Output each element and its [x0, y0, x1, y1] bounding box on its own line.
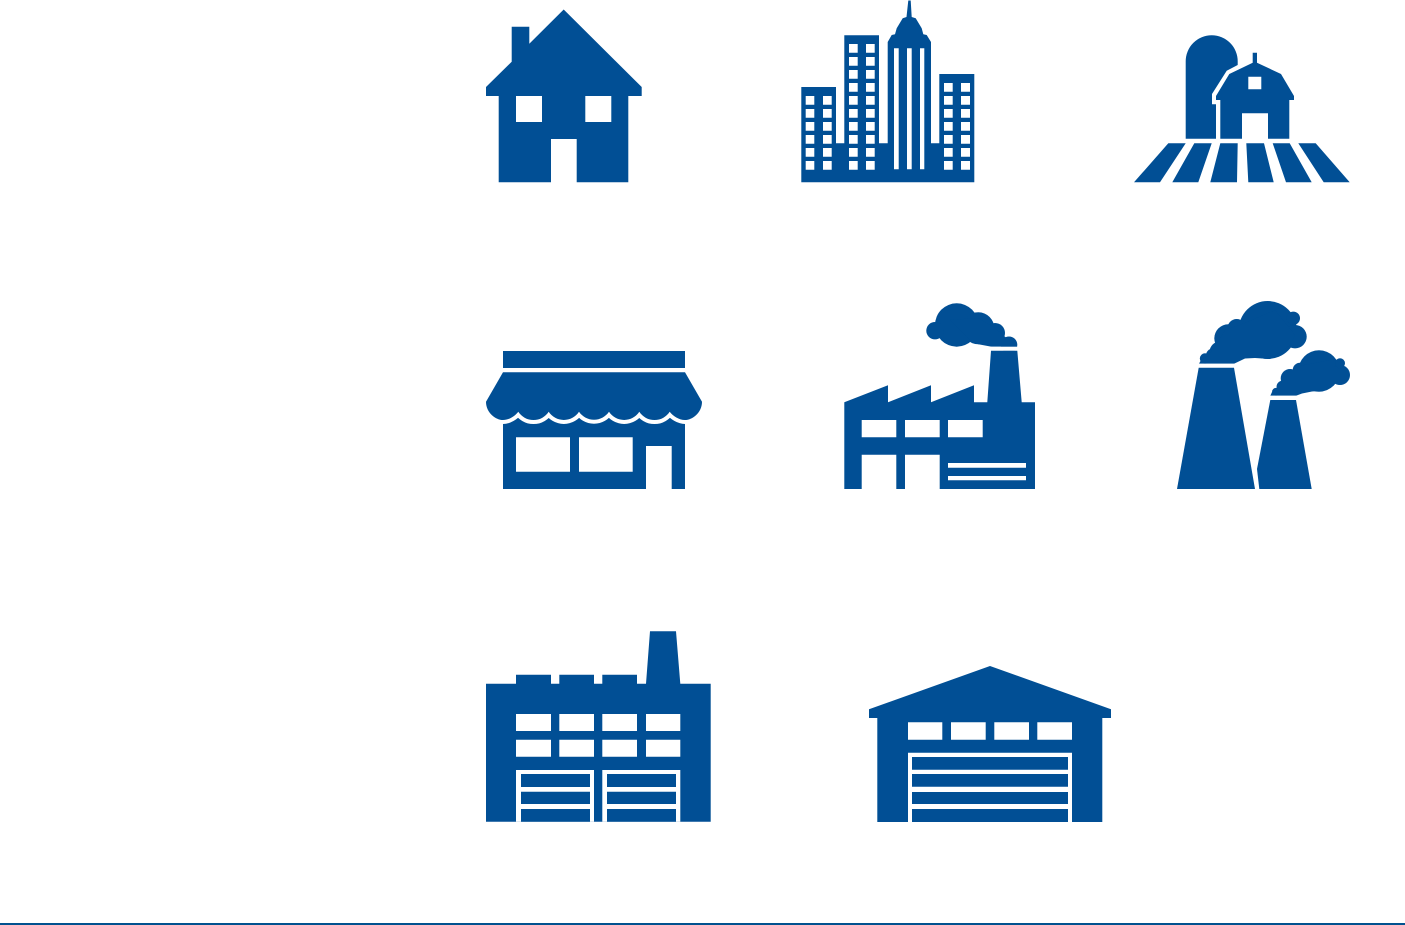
icon: warehouse with roller door [869, 666, 1111, 822]
icon: factory with smokestack and cloud [844, 303, 1035, 489]
icon: industrial building with garage doors [486, 631, 711, 822]
icon: city skyline [801, 0, 974, 182]
bottom rule [0, 923, 1405, 925]
icon: power plant cooling towers with smoke [1177, 301, 1350, 489]
icon: house [486, 10, 642, 182]
icon: storefront with awning [486, 351, 702, 489]
icon: farm with silo, barn and field [1134, 35, 1350, 182]
